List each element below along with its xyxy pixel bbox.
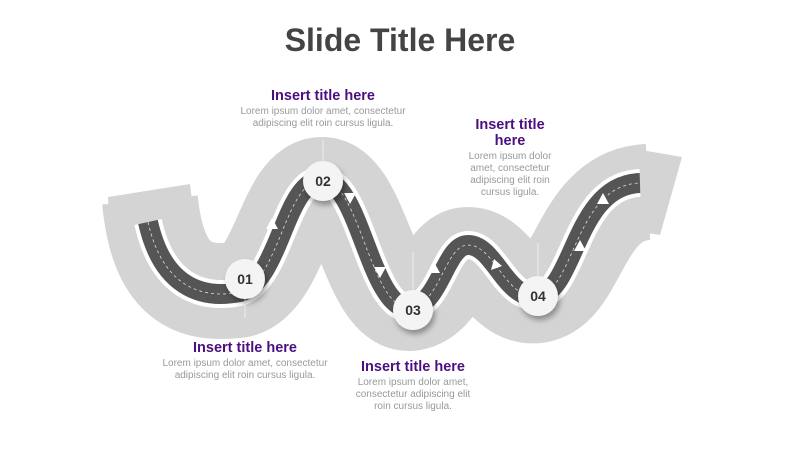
callout 03: Insert title here: [361, 359, 465, 375]
markers: 02: [315, 173, 331, 189]
callout 03: [356, 359, 470, 412]
callout 01: [162, 340, 328, 381]
callout 04: [469, 117, 552, 198]
markers: 04: [530, 288, 546, 304]
callout 01: Insert title here: [193, 340, 297, 356]
markers: 01: [237, 271, 253, 287]
callout 02: adipiscing elit roin cursus ligula.: [253, 118, 393, 129]
callout 03: roin cursus ligula.: [374, 401, 452, 412]
arrows on road: [266, 193, 609, 278]
callout 03: consectetur adipiscing elit: [356, 389, 470, 400]
callout 01: adipiscing elit roin cursus ligula.: [175, 370, 315, 381]
callout 02: Insert title here: [271, 88, 375, 104]
callout 04: cursus ligula.: [481, 187, 539, 198]
callout 03: Lorem ipsum dolor amet,: [358, 377, 468, 388]
road: [148, 180, 640, 308]
callout 02: [240, 88, 406, 129]
callout 04: Lorem ipsum dolor: [469, 151, 551, 162]
markers: 03: [405, 302, 421, 318]
callout 04: adipiscing elit roin: [470, 175, 550, 186]
callout 01: Lorem ipsum dolor amet, consectetur: [162, 358, 328, 369]
callout 04: Insert title: [475, 117, 545, 133]
callout 04: amet, consectetur: [470, 163, 550, 174]
markers: [225, 161, 558, 330]
callout 04: here: [495, 133, 525, 149]
callout 02: Lorem ipsum dolor amet, consectetur: [240, 106, 406, 117]
gray band: [108, 148, 682, 303]
title: Slide Title Here: [285, 22, 515, 58]
connector lines: [245, 140, 538, 318]
